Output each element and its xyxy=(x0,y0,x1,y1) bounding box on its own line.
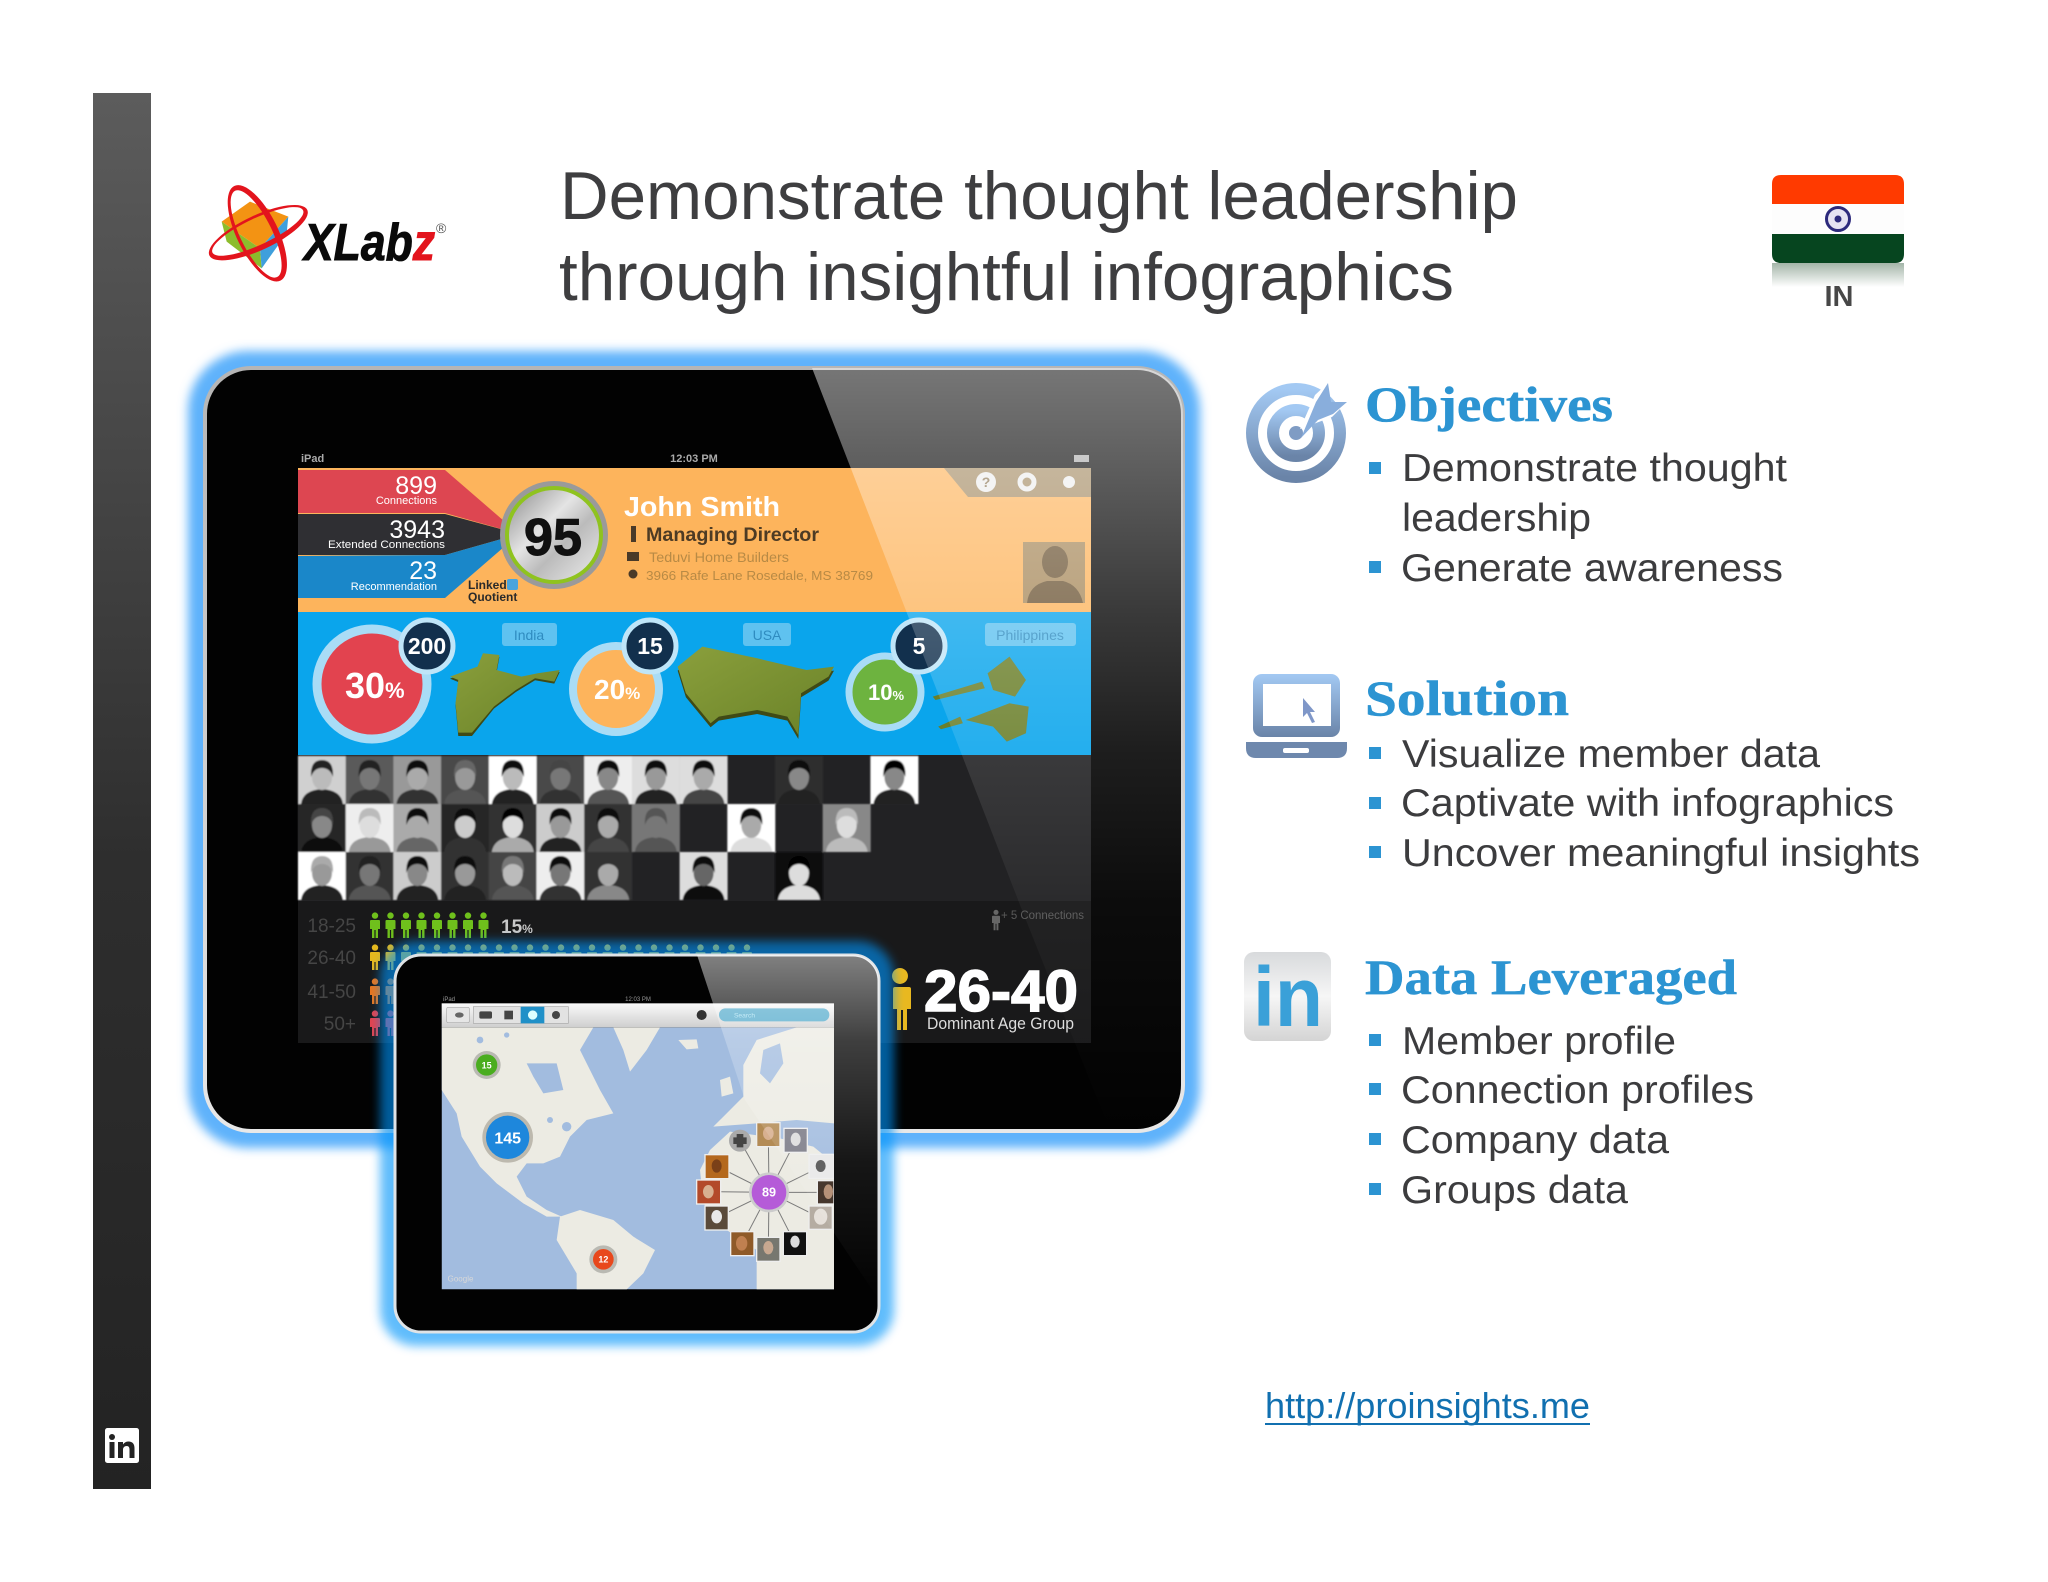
USA stat: USA xyxy=(753,627,782,643)
age share label: 15% xyxy=(501,917,533,938)
left sidebar bar xyxy=(93,93,151,1489)
panel: age groups: 18-25 xyxy=(307,916,356,937)
panel: country breakdown xyxy=(298,612,1091,755)
status bar: iPad xyxy=(301,453,324,465)
Philippines stat: 5 xyxy=(913,633,926,659)
small status bar: iPad xyxy=(443,997,455,1003)
panel: data leveraged xyxy=(1244,949,1754,1212)
website link: http://proinsights.me xyxy=(1265,1385,1590,1426)
small status bar: 12:03 PM xyxy=(625,997,651,1003)
India stat: 200 xyxy=(408,633,446,659)
stat ribbons: Recommendation xyxy=(351,581,437,593)
world map xyxy=(442,1027,834,1289)
map clusters xyxy=(473,1051,789,1273)
tablet glow xyxy=(188,351,1200,1148)
USA stat: 20% xyxy=(594,674,640,705)
status bar xyxy=(301,453,1089,465)
pictogram legend: + 5 Connections xyxy=(1001,908,1084,922)
India stat: 30% xyxy=(345,665,405,706)
dominant age callout: Dominant Age Group xyxy=(927,1014,1074,1033)
icon: linkedin tile: in xyxy=(1253,950,1323,1044)
dominant age callout: 26-40 xyxy=(924,959,1078,1024)
age pictogram: 41-50 xyxy=(370,978,396,1004)
stat ribbons: 3943 xyxy=(389,516,445,544)
logo: XLabz: XLabz xyxy=(301,214,435,272)
dominant age callout xyxy=(891,959,1078,1033)
logo: XLabz: ® xyxy=(436,220,447,236)
heading: Solution xyxy=(1365,670,1569,726)
member details: 3966 Rafe Lane Rosedale, MS 38769 xyxy=(646,568,873,583)
screen glare xyxy=(812,368,1183,938)
panel: large tablet xyxy=(188,351,1200,1148)
logo: XLabz xyxy=(202,177,447,290)
linked quotient gauge: Linked xyxy=(468,578,507,592)
settings tab xyxy=(944,468,1091,497)
bullet list: leadership xyxy=(1402,497,1591,540)
India stat: India xyxy=(514,627,544,643)
panel: age groups: 50+ xyxy=(324,1014,356,1035)
map clusters: 15 xyxy=(482,1060,492,1070)
age pictogram: 50+ xyxy=(370,1010,396,1036)
small tablet glow xyxy=(380,941,894,1346)
map clusters: 145 xyxy=(494,1130,521,1147)
bullet list: Company data xyxy=(1401,1119,1669,1162)
profile photo xyxy=(1023,542,1085,603)
map clusters: 12 xyxy=(598,1255,608,1265)
heading: Objectives xyxy=(1365,376,1613,432)
bullet list: Connection profiles xyxy=(1401,1069,1754,1112)
Philippines stat: 10% xyxy=(868,680,904,705)
bullet list: Generate awareness xyxy=(1401,547,1783,590)
title: Demonstrate thought leadership xyxy=(560,158,1518,234)
panel: connection photos xyxy=(298,755,1091,901)
member details: Teduvi Home Builders xyxy=(649,549,789,565)
Philippines stat: Philippines xyxy=(996,627,1064,643)
title xyxy=(559,158,1518,315)
stat ribbons xyxy=(298,470,519,598)
bullet list: Uncover meaningful insights xyxy=(1402,832,1920,875)
panel: age groups: 41-50 xyxy=(307,982,356,1003)
bullet list: Member profile xyxy=(1402,1020,1676,1063)
Philippines stat xyxy=(849,620,1076,742)
tablet body xyxy=(205,368,1183,1131)
stat ribbons: 23 xyxy=(409,557,437,585)
icon: linkedin badge on sidebar xyxy=(105,1428,139,1463)
world map: Google xyxy=(448,1275,474,1284)
map thumbnails xyxy=(697,1123,834,1261)
panel: profile header xyxy=(298,468,1091,612)
bullet list: Visualize member data xyxy=(1402,733,1820,776)
member details xyxy=(624,491,873,583)
USA stat: 15 xyxy=(637,633,663,659)
map toolbar: Search xyxy=(734,1013,755,1020)
bullet list xyxy=(1369,447,1787,590)
panel: age groups: 26-40 xyxy=(307,948,356,969)
heading: Data Leveraged xyxy=(1365,949,1737,1005)
bullet list: Captivate with infographics xyxy=(1401,782,1894,825)
member details: John Smith xyxy=(624,491,780,522)
panel: age groups xyxy=(298,901,1091,1043)
USA stat xyxy=(573,620,834,739)
linked quotient gauge xyxy=(468,481,608,604)
icon: India flag with country code xyxy=(1772,175,1904,313)
stat ribbons: Extended Connections xyxy=(328,539,446,551)
small tablet glare xyxy=(697,955,879,1242)
bullet list xyxy=(1369,1020,1754,1212)
status bar: 12:03 PM xyxy=(670,453,718,465)
panel: solution xyxy=(1246,670,1920,875)
bullet list: Groups data xyxy=(1401,1169,1628,1212)
icon: target with arrow xyxy=(1252,383,1347,477)
stat ribbons: 899 xyxy=(395,472,437,500)
bullet list xyxy=(1369,733,1920,875)
linked quotient gauge: 95 xyxy=(524,509,582,567)
age pictogram: 18-25 xyxy=(370,912,488,938)
small status bar xyxy=(443,997,651,1003)
panel: small tablet map view xyxy=(380,941,894,1346)
member details: Managing Director xyxy=(646,525,820,546)
India stat xyxy=(317,620,560,739)
icon: laptop with cursor xyxy=(1246,674,1347,758)
panel: objectives xyxy=(1252,376,1787,590)
title: through insightful infographics xyxy=(559,239,1454,315)
map clusters: 89 xyxy=(762,1186,776,1200)
stat ribbons: Connections xyxy=(376,495,437,507)
linked quotient gauge: Quotient xyxy=(468,590,517,604)
settings tab: ? xyxy=(982,474,990,490)
bullet list: Demonstrate thought xyxy=(1402,447,1787,490)
map toolbar xyxy=(442,1003,834,1027)
icon: India flag with country code: IN xyxy=(1824,281,1854,313)
age pictogram: 26-40 xyxy=(370,944,752,970)
pictogram legend xyxy=(992,908,1084,930)
small tablet body xyxy=(395,955,879,1332)
